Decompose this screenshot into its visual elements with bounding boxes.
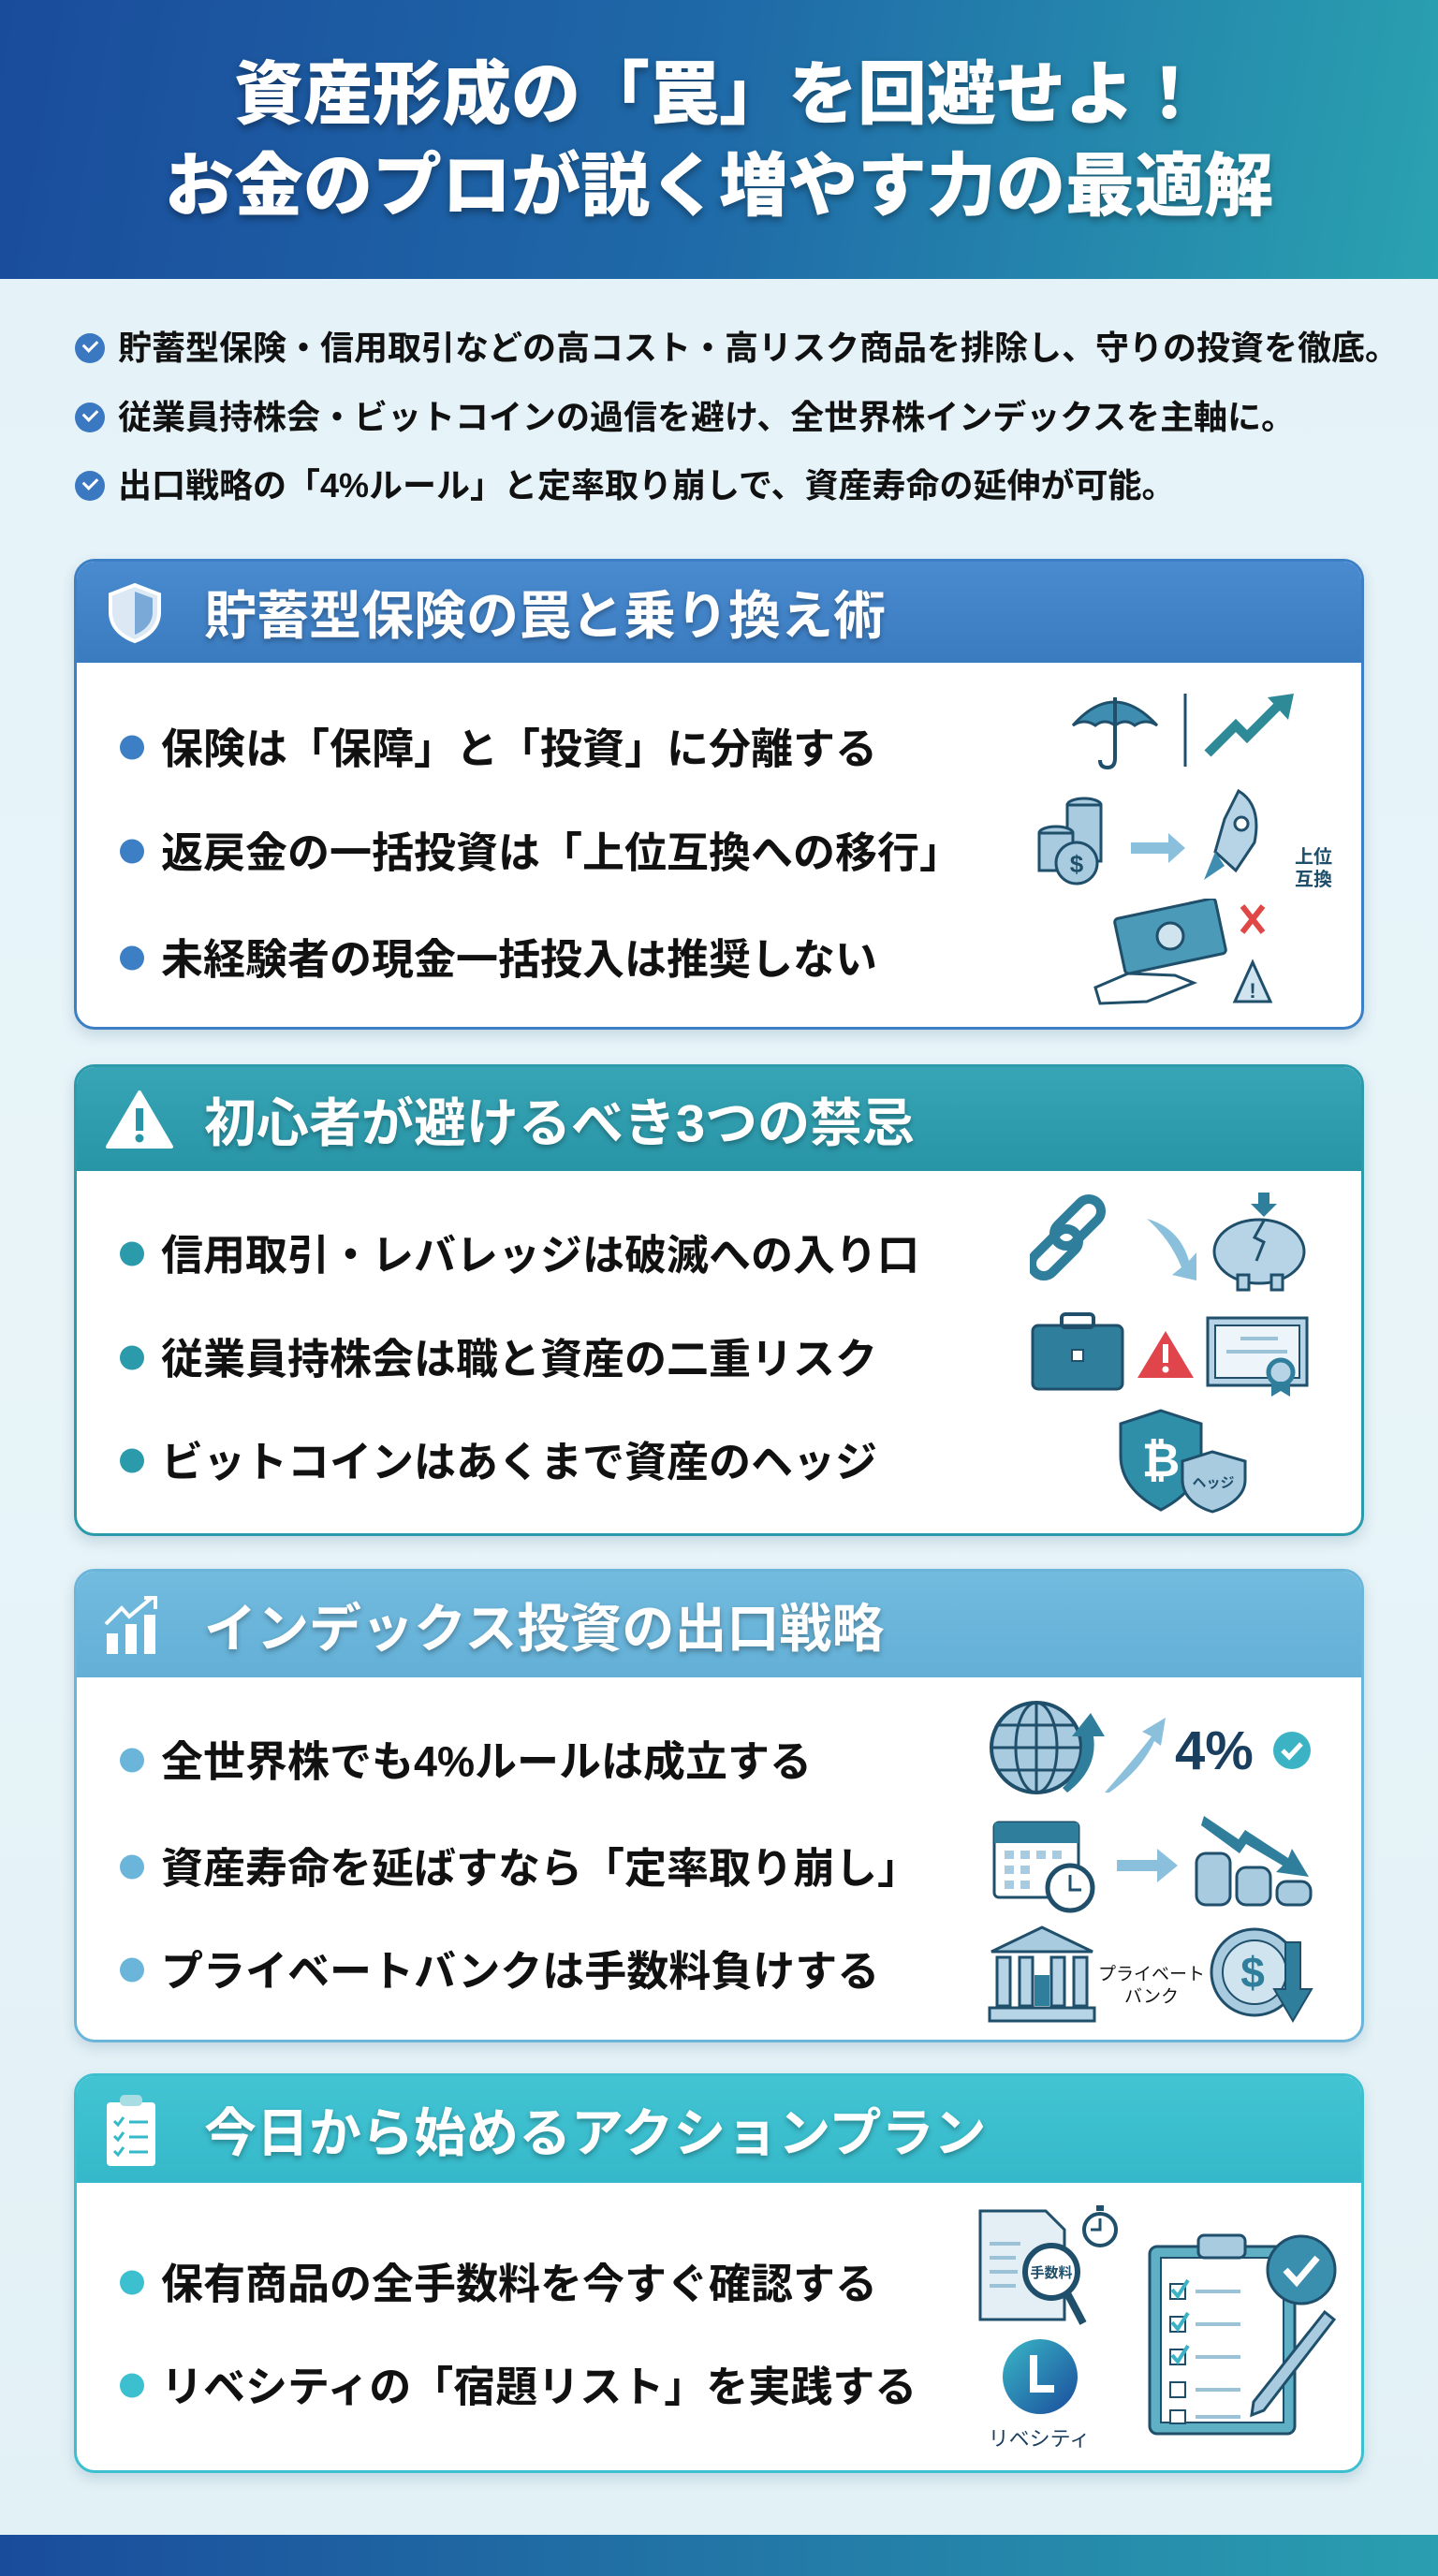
icon: shield [109,582,161,644]
icon: bitcoin shield [1120,1409,1247,1514]
icon: fee document: 手数料 [1030,2264,1073,2281]
icon: chain to piggy [1030,1193,1305,1292]
icon: private bank: $ [1240,1948,1265,1997]
icon: coins to rocket [1037,788,1332,889]
icon: bitcoin shield: ₿ [1142,1434,1180,1486]
icon: private bank: バンク [1124,1986,1179,2007]
footer band [0,2535,1438,2576]
icon: cash warning: ! [1249,979,1256,1003]
icon: clipboard [107,2095,155,2166]
summary bullets [75,329,1399,505]
icon: private bank [989,1925,1313,2023]
icon: coins to rocket: 上位 [1295,846,1332,868]
icon: Libecity logo [989,2339,1090,2451]
item 3: ビットコインはあくまで資産のヘッジ [161,1438,877,1486]
panel heading [77,1067,1361,1171]
icon: coins to rocket: $ [1070,850,1084,878]
icon: private bank: プライベート [1098,1964,1205,1984]
icon: globe 4 percent [990,1701,1311,1794]
item 2: リベシティの「宿題リスト」を実践する [161,2363,917,2411]
panel heading [77,2076,1361,2183]
item 1: 保有商品の全手数料を今すぐ確認する [161,2260,877,2308]
icon: bitcoin shield: ヘッジ [1192,1475,1235,1491]
summary 2: 従業員持株会・ビットコインの過信を避け、全世界株インデックスを主軸に。 [118,398,1295,436]
icon: briefcase warning certificate [1032,1312,1309,1397]
panel heading: 貯蓄型保険の罠と乗り換え術 [204,586,886,646]
icon: warning [106,1090,174,1149]
panel heading [77,1572,1361,1677]
icon: fee document [979,2205,1118,2325]
panel heading: 今日から始めるアクションプラン [204,2104,987,2162]
item 1: 全世界株でも4%ルールは成立する [161,1737,812,1786]
panel heading: 初心者が避けるべき3つの禁忌 [204,1093,915,1152]
summary 3: 出口戦略の「4%ルール」と定率取り崩しで、資産寿命の延伸が可能。 [118,466,1176,505]
summary 1: 貯蓄型保険・信用取引などの高コスト・高リスク商品を排除し、守りの投資を徹底。 [118,329,1399,367]
title [165,55,1275,225]
panel: insurance [74,559,1364,1030]
icon: Libecity logo: リベシティ [989,2427,1090,2451]
item 2: 従業員持株会は職と資産の二重リスク [161,1335,877,1383]
item 1: 保険は「保障」と「投資」に分離する [161,724,877,773]
header banner [0,0,1438,279]
item 1: 信用取引・レバレッジは破滅への入り口 [161,1232,919,1279]
panel: action plan [74,2073,1364,2473]
panel heading: インデックス投資の出口戦略 [204,1599,884,1658]
icon: cash warning [1093,899,1273,1005]
panel heading [77,562,1361,663]
title: 資産形成の「罠」を回避せよ！ [234,55,1204,133]
panel: exit strategy [74,1569,1364,2042]
title: お金のプロが説く増やす力の最適解 [165,147,1273,225]
icon: calendar to coins [992,1816,1313,1913]
item 2: 返戻金の一括投資は「上位互換への移行」 [161,829,961,876]
icon: globe 4 percent: 4% [1175,1720,1254,1781]
icon: checklist clipboard [1148,2233,1337,2436]
item 3: プライベートバンクは手数料負けする [161,1947,879,1996]
item 3: 未経験者の現金一括投入は推奨しない [161,936,877,983]
icon: umbrella and growth [1072,694,1294,769]
icon: growth bars [105,1596,157,1654]
panel: taboos [74,1064,1364,1536]
item 2: 資産寿命を延ばすなら「定率取り崩し」 [161,1844,919,1893]
